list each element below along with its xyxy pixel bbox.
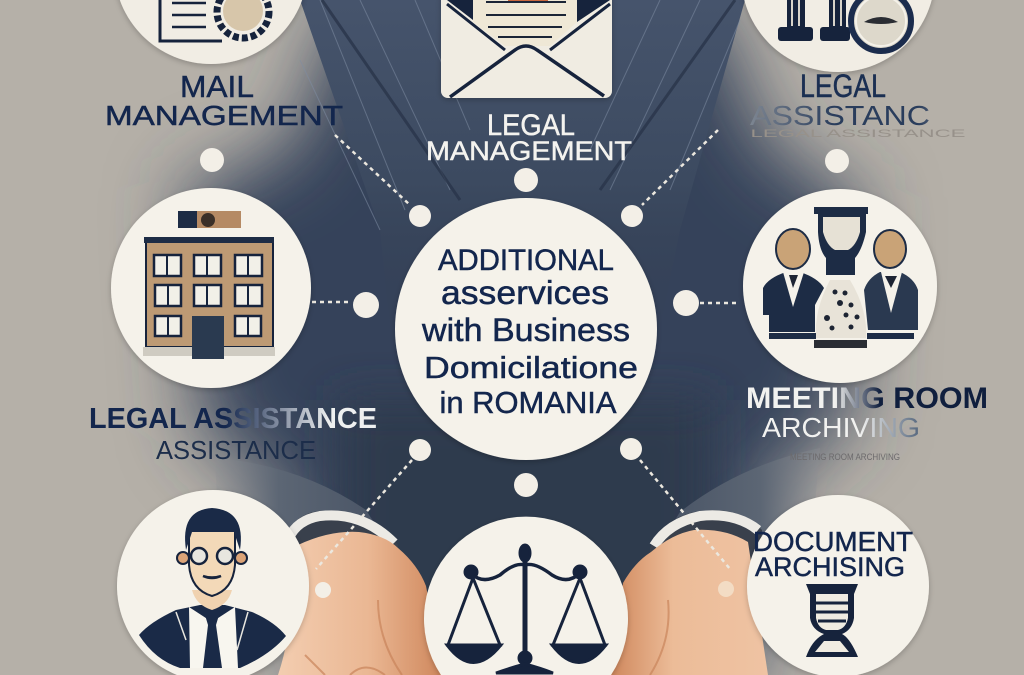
icon: hourglass [806,584,858,657]
label: document archiving: ARCHISING [755,552,905,582]
left building circle [111,188,311,388]
top-right legal icon circle [741,0,935,72]
label: meeting room archiving [746,382,988,462]
central title: with Business [421,312,630,348]
bottom-right document archiving circle [747,495,929,675]
connector dots [200,148,849,598]
label: legal assistance top right: LEGAL [800,68,886,104]
label: legal assistance top right [750,68,966,140]
finger creases [305,600,669,675]
top-centre envelope icon [441,0,612,98]
left hand [278,532,443,675]
central title [421,244,638,420]
label: legal assistance left: LEGAL ASSISTANCE [89,403,377,435]
connector lines [312,130,738,569]
icon: scales of justice [447,545,606,673]
label: mail management: MAIL [180,69,254,104]
top-left mail icon circle [114,0,308,64]
label: document archiving: DOCUMENT [753,526,913,557]
left sleeve [215,458,398,560]
label: legal management: MANAGEMENT [426,136,632,166]
label: legal management: LEGAL [487,109,575,142]
jacket lapel stripes [300,0,740,230]
right meeting room circle [743,189,937,383]
label: document archiving [753,526,913,582]
icon: meeting people and hourglass [763,207,918,348]
bottom-left person circle [117,490,309,675]
icon: lawyer portrait [139,508,286,668]
central title: ADDITIONAL [438,244,614,277]
label: meeting room archiving: MEETING ROOM ARCHIVING [790,452,900,462]
central title: asservices [441,274,609,311]
icon: office building [143,211,275,359]
label: legal assistance top right: LEGAL ASSISTANCE [750,128,966,140]
label: meeting room archiving: ARCHIVING [762,412,920,443]
label: legal assistance left: ASSISTANCE [156,435,316,465]
central circle [395,198,657,460]
label: legal assistance left [89,403,377,465]
central title: in ROMANIA [440,385,617,420]
label: meeting room archiving: MEETING ROOM [746,382,988,415]
central title: Domicilatione [424,350,638,385]
label: mail management [105,69,343,131]
label: legal management [426,109,632,166]
label: legal assistance top right: ASSISTANC [750,100,930,131]
bottom-centre scales circle [424,517,628,675]
right hand [610,530,768,675]
icon: columns and magnifier [778,0,911,51]
right sleeve [650,448,820,560]
label: mail management: MANAGEMENT [105,100,343,131]
icon: document with seal [160,0,269,41]
